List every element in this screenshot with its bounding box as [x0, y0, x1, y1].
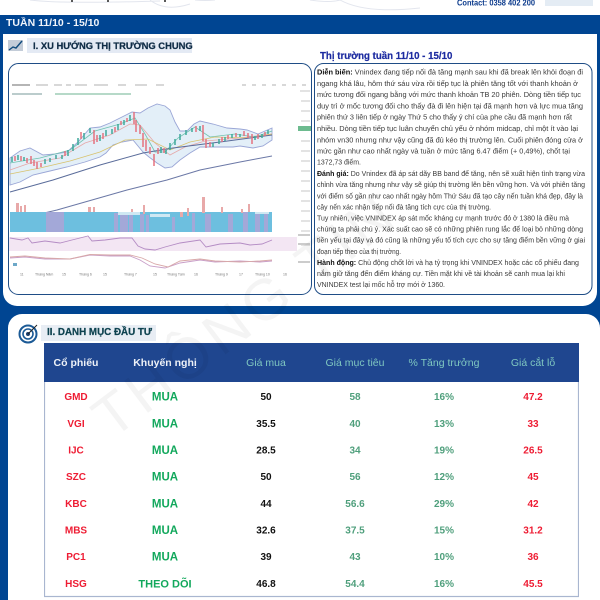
section heading: market trend: I. XU HƯỚNG THỊ TRƯỜNG CHUNG — [33, 40, 193, 51]
watermark: THÔNG TIN — [81, 180, 410, 450]
stock tickers column: PC1 — [66, 552, 86, 563]
stop loss column: 47.2 — [523, 392, 543, 403]
commentary text: tiền yếu tại đây và đó cũng là những yếu tố tích cực cho sự tăng điểm bền vững ở giai — [317, 236, 585, 244]
buy price column: 44 — [260, 499, 272, 510]
time axis — [20, 272, 287, 276]
growth column: 15% — [434, 526, 454, 536]
stock tickers column: VGI — [67, 419, 85, 430]
commentary text: mức tương đối ngang bằng với mức thanh khoản TB 20 phiên. Dòng tiền tiếp tục — [317, 90, 582, 99]
table header: Giá mua — [246, 357, 286, 369]
table header — [44, 343, 579, 382]
table header: % Tăng trưởng — [409, 357, 480, 369]
commentary text: nhiều. Dòng tiền tiếp tục luân chuyển chủ yếu ở nhóm midcap, chỉ một ít vào lại — [317, 124, 578, 133]
time axis: Tháng 10 — [255, 272, 270, 276]
stop loss column: 31.2 — [523, 526, 543, 536]
time axis: 15 — [62, 272, 66, 276]
growth column: 29% — [434, 499, 454, 510]
buy price column — [256, 392, 276, 590]
stock tickers column: SZC — [66, 472, 86, 483]
commentary text: chúng ta phải chú ý. Xác suất cao sẽ có những phiên rung lắc để loại bỏ những dòng — [317, 224, 583, 234]
panel: market commentary — [314, 63, 592, 295]
commentary text: VNINDEX test lại mốc hỗ trợ mới ở 1360. — [317, 280, 445, 289]
buy price column: 32.6 — [256, 526, 276, 536]
stop loss column: 26.5 — [523, 446, 543, 456]
commentary text: ngang khá lâu, hôm thứ sáu vừa rồi tiếp tục là phiên tăng tốt với thanh khoản ở — [317, 79, 579, 88]
growth column: 12% — [434, 472, 454, 483]
commentary text: Đánh giá: Do Vnindex đã áp sát dãy BB band để tăng, nên sẽ xuất hiện tình trạng vừa — [317, 169, 585, 178]
recommendation column: THEO DÕI — [138, 578, 192, 590]
time axis: Tháng Năm — [35, 272, 53, 276]
buy price column: 28.5 — [256, 446, 276, 456]
time axis: Tháng 9 — [215, 272, 228, 276]
commentary text: đoạn tiếp theo của thị trường. — [317, 247, 401, 256]
page header strip — [0, 0, 600, 15]
time axis: Tháng 7 — [124, 272, 137, 276]
commentary text: 1372,73 điểm. — [317, 158, 361, 166]
stop loss column — [523, 392, 543, 590]
time axis: 16 — [194, 272, 198, 276]
growth column: 19% — [434, 446, 454, 456]
stop loss column: 42 — [527, 499, 539, 510]
commentary text: Diễn biến: Vnindex đang tiếp nối đà tăng mạnh sau khi đã break lên khỏi đoạn đi — [317, 68, 583, 76]
target price column: 56.6 — [345, 499, 365, 510]
target price column: 54.4 — [345, 579, 365, 590]
moving averages — [10, 124, 272, 170]
panel: price chart — [8, 63, 312, 295]
time axis: 15 — [153, 272, 157, 276]
stop loss column: 45 — [527, 472, 539, 483]
commentary text — [317, 68, 585, 289]
buy price column: 39 — [260, 552, 272, 563]
chart toolbar — [12, 84, 306, 95]
commentary text: phiên thứ 3 liên tiếp ở ngày Thứ 5 cho thấy ý chí của phe cầu đã mạnh hơn rất — [317, 113, 572, 122]
recommendation column: MUA — [152, 392, 178, 404]
table header: Giá cắt lỗ — [511, 356, 555, 369]
target price column: 58 — [349, 392, 361, 403]
portfolio table — [44, 343, 579, 598]
stock tickers column — [64, 392, 88, 590]
recommendation column — [138, 392, 192, 590]
MACD panel — [10, 254, 310, 268]
long moving average lines — [10, 135, 272, 192]
section heading: portfolio — [41, 325, 156, 341]
buy price column: 50 — [260, 392, 272, 403]
recommendation column: MUA — [152, 418, 178, 430]
table header: Cổ phiếu — [54, 357, 98, 369]
time axis: 15 — [103, 272, 107, 276]
target price column: 43 — [349, 552, 361, 563]
growth column: 10% — [434, 552, 454, 563]
stock tickers column: GMD — [64, 392, 88, 403]
buy price column: 50 — [260, 472, 272, 483]
time axis: 17 — [239, 272, 243, 276]
section heading: portfolio: II. DANH MỤC ĐẦU TƯ — [47, 327, 152, 338]
time axis: 11 — [20, 272, 24, 276]
table rows — [64, 392, 543, 590]
stock tickers column: HSG — [65, 579, 87, 590]
table header: Giá mục tiêu — [326, 357, 385, 369]
commentary text: nắm giữ tăng đến điểm kháng cự. Tiền mặt khi về tài khoản sẽ canh mua lại khi — [317, 269, 565, 278]
stop loss column: 45.5 — [523, 579, 543, 590]
recommendation column: MUA — [152, 498, 178, 510]
recommendation column: MUA — [152, 472, 178, 484]
commentary text: cây nến xác nhận tiếp nối đà tăng tích cực của thị trường. — [317, 203, 491, 212]
commentary text: với điểm số gần như cao nhất ngày hôm Thứ Sáu đã tạo cây nến tuần khá đẹp, đây là — [317, 191, 583, 200]
stock tickers column: KBC — [65, 499, 87, 510]
stop loss column: 33 — [527, 419, 539, 430]
recommendation column: MUA — [152, 445, 178, 457]
week heading: TUẦN 11/10 - 15/10 — [6, 17, 99, 29]
buy price column: 35.5 — [256, 419, 276, 430]
table header: Khuyến nghị — [133, 357, 197, 369]
buy price column: 46.8 — [256, 579, 276, 590]
RSI panel — [9, 234, 310, 251]
time axis: Tháng Tám — [167, 272, 185, 276]
target price column — [345, 392, 365, 590]
target price column: 34 — [349, 446, 361, 456]
volume bars — [10, 197, 272, 232]
recommendation column: MUA — [152, 525, 178, 537]
commentary text: chỉnh vừa tăng nhưng như vậy sẽ giúp thị trường lên bền vững hơn. Và với phiên tăng — [317, 180, 585, 189]
target price column: 37.5 — [345, 526, 365, 536]
candles — [12, 112, 268, 169]
growth column: 16% — [434, 579, 454, 590]
commentary text: nhóm vn30 nhưng như vậy cũng đã đủ kéo thị trường lên. Cuối phiên đóng cửa ở — [317, 135, 584, 144]
growth column: 13% — [434, 419, 454, 430]
commentary text: Tuy nhiên, việc VNINDEX áp sát mốc kháng cự mạnh trước đó ở 1380 là điều mà — [317, 214, 569, 222]
stock tickers column: IJC — [68, 446, 84, 456]
chart subtitle: Thị trường tuần 11/10 - 15/10 — [320, 51, 452, 62]
panel: portfolio — [8, 314, 600, 600]
growth column: 16% — [434, 392, 454, 403]
growth column — [434, 392, 454, 590]
icon: line chart — [8, 40, 23, 51]
stop loss column: 36 — [527, 552, 539, 563]
bollinger bands — [10, 104, 272, 185]
panel: market trend — [3, 34, 597, 306]
commentary text: mức gần như cao nhất ngày và tuần ở mức tăng 6.47 điểm (+ 0,49%), chốt tại — [317, 146, 570, 155]
commentary text: Hành động: Chủ động chốt lời và hạ tỷ trọng khi VNINDEX hoặc các cổ phiếu đang — [317, 258, 579, 267]
commentary text: duy trì ở mốc tương đối cho thấy đà đi lên hiện tại đã mạnh hơn và lực mua tăng — [317, 101, 583, 110]
price axis — [298, 91, 311, 262]
target price column: 40 — [349, 419, 361, 430]
recommendation column: MUA — [152, 552, 178, 564]
time axis: 16 — [283, 272, 287, 276]
header tag — [545, 0, 593, 6]
time axis: Tháng 6 — [79, 272, 92, 276]
icon: target — [18, 324, 38, 344]
target price column: 56 — [349, 472, 361, 483]
stock tickers column: MBS — [65, 526, 87, 536]
